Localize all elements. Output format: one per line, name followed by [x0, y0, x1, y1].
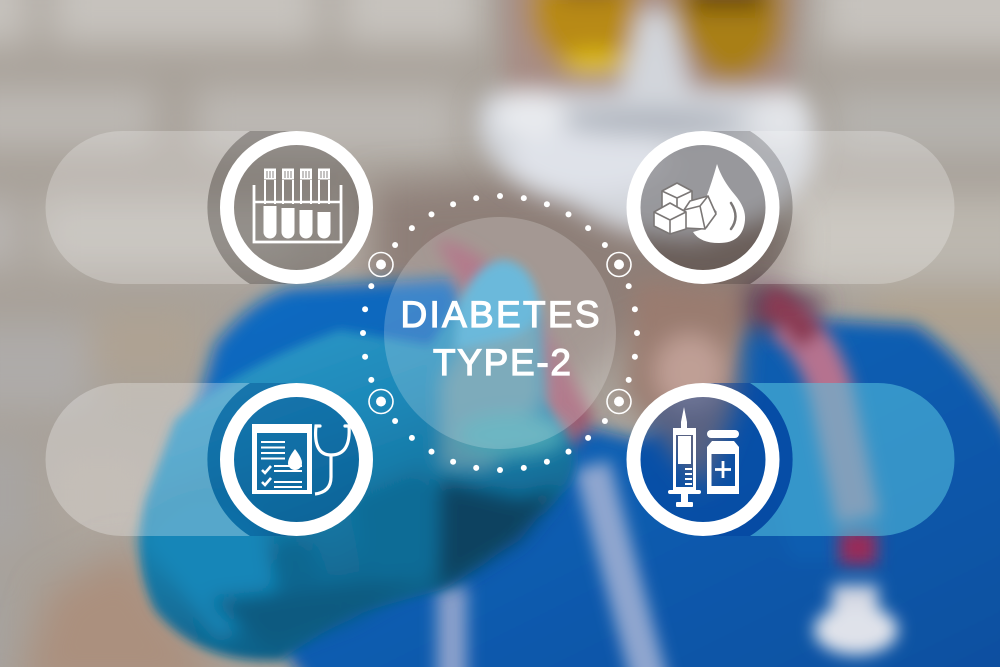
connector node: bottom left [369, 390, 393, 414]
connector node: top right [607, 252, 631, 276]
panel: test tubes pill [46, 131, 366, 284]
panel: sugar and blood drop pill [634, 131, 954, 284]
panel: medical record pill [46, 383, 366, 536]
goggles, mask [477, 0, 816, 240]
icon: sugar cubes and drop [654, 164, 745, 243]
title: Diabetes Type-2 [400, 294, 600, 383]
title: Diabetes Type-2: DIABETES [400, 294, 600, 335]
icon: syringe and vial [668, 407, 739, 507]
brown band under mask [370, 170, 790, 400]
icon: clipboard and stethoscope [252, 424, 349, 494]
forearm skin [20, 550, 230, 667]
central glass circle [384, 217, 616, 449]
chest and neck [625, 280, 830, 490]
gloved hand [139, 260, 575, 660]
blue scrubs [170, 278, 1000, 667]
stethoscope and straps [435, 240, 898, 667]
connector node: bottom right [607, 390, 631, 414]
icon: test tubes [254, 168, 341, 242]
title: Diabetes Type-2: TYPE-2 [433, 342, 571, 383]
dotted ring [360, 193, 640, 473]
connector node: top left [369, 252, 393, 276]
panel: medication pill [634, 383, 954, 536]
